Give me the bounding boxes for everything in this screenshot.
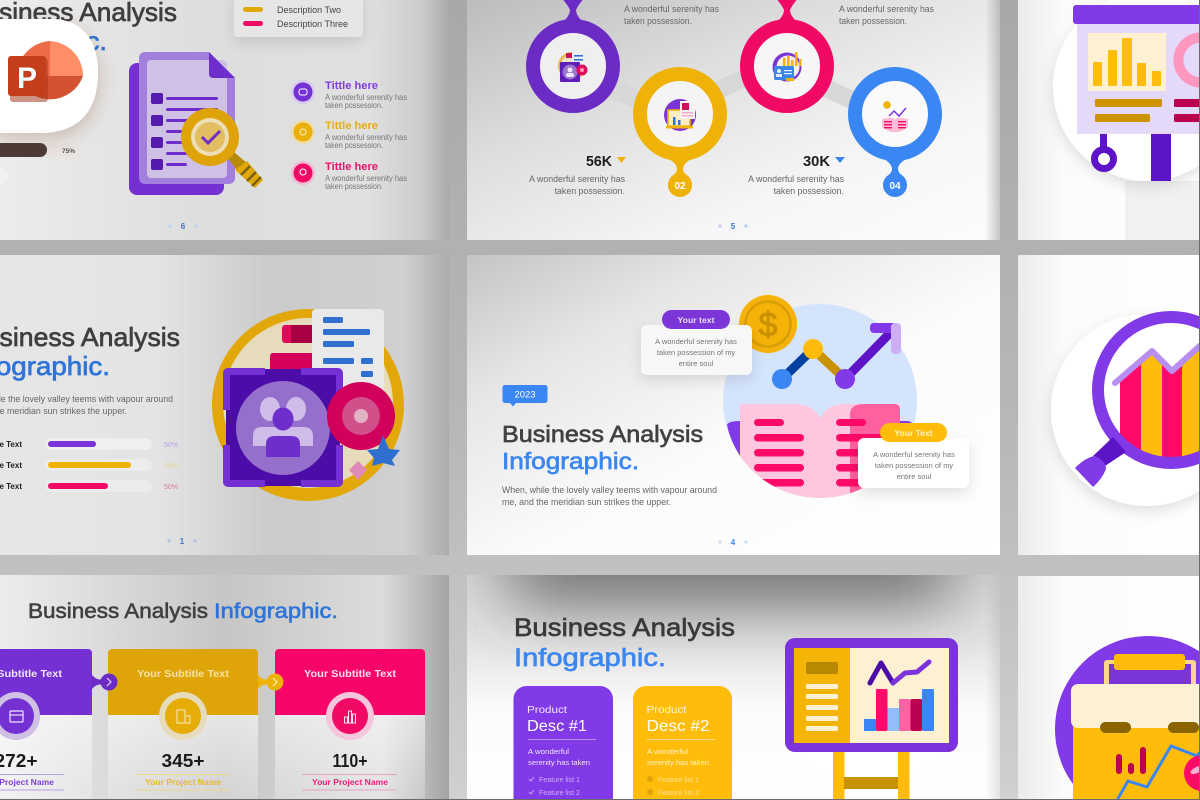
heading: cards title: Business Analysis [28,600,208,623]
chart: progress bars: 50% [164,463,178,470]
card: gold subtitle: 345+ [162,751,204,771]
panel: slide 5 ring timeline [467,0,1000,240]
logo: PowerPoint icon on white badge: P [17,62,37,95]
arrow: gold connector [258,674,284,690]
card: product desc 1: Feature list 1 [539,777,580,784]
icon: board with bars and donut [1073,5,1200,181]
callout: your text gold: A wonderful serenity has [873,450,955,459]
text: main paragraph [502,485,717,508]
page number 1 [167,537,197,546]
icon: mini report screen [664,99,696,131]
arrow: purple connector [92,674,118,690]
card: product desc 1: Product [527,704,567,716]
callout: your text gold: taken possession of my [875,461,953,470]
card: product desc 2: Feature list 1 [658,777,699,784]
progress bar: 75% [62,148,75,155]
callout: your text purple: Your text [678,315,715,325]
icon: briefcase with chart [1055,636,1200,800]
heading: main title: Business Analysis [502,421,703,447]
card: product desc 1: serenity has taken [528,758,590,767]
card: gold subtitle [108,649,258,800]
stat: 56K: A wonderful serenity has [529,174,626,184]
card: pink subtitle: Your Project Name [312,778,389,787]
item: pink title: A wonderful serenity has [325,174,407,183]
icon: mini id card and chart [772,52,802,82]
callout: your text gold: Your Text [894,428,933,438]
card: product desc 1: Desc #1 [527,718,587,735]
callout: your text purple: taken possession of my [657,348,735,357]
heading: main title: Infographic. [502,448,639,474]
item: gold title: Tittle here [325,120,378,132]
heading: slide 1 title [0,322,180,381]
badge: 2023: 2023 [514,390,536,400]
ring: gold step 02 [640,74,720,197]
heading: cards title [28,600,338,623]
icon: mini portrait target [558,52,588,82]
item: purple title [291,80,407,110]
panel: bottom right briefcase [1018,576,1200,800]
item: purple title: taken possession. [325,101,383,110]
icon: magnifier over stripes [1075,317,1200,487]
chart: progress bars: 50% [164,484,178,491]
chart: progress bars: 50% [164,442,178,449]
connectors between rings [715,71,854,108]
ring: blue step 04: 04 [889,181,901,192]
item: pink title: taken possession. [325,182,383,191]
ring: gold step 02: 02 [674,181,686,192]
card: purple subtitle [0,649,92,800]
stat: 56K: taken possession. [555,186,625,196]
page number 5: 5 [731,222,736,231]
panel: slide 6 document review [0,0,449,240]
logo: PowerPoint icon on white badge [0,19,98,133]
icon: dollar coin [739,295,797,353]
item: pink title [291,161,407,191]
item: gold title: taken possession. [325,141,383,150]
page number 4: 4 [731,538,736,547]
heading: product title: Business Analysis [514,614,735,642]
text: step 03 description [839,4,935,26]
stat: 30K: taken possession. [774,186,844,196]
ring: blue step 04 [855,74,935,197]
card: gold subtitle: Your Subtitle Text [137,668,230,680]
text: step 01 description: taken possession. [624,16,692,26]
icon: portrait frame with target [212,309,404,501]
stat: 30K: 30K [803,154,831,170]
item: purple title: A wonderful serenity has [325,93,407,102]
item: pink title: Tittle here [325,161,378,173]
page number 4 [718,538,748,547]
chart: progress bars [0,438,178,492]
card: product desc 2: serenity has taken [647,758,709,767]
panel: slide 2 product board [467,575,1000,799]
heading: slide 6 title [0,0,177,56]
text: step 03 description: taken possession. [839,16,907,26]
card: gold subtitle: Your Project Name [145,778,222,787]
ring: pink step 03 [747,0,827,106]
stat: 30K: A wonderful serenity has [748,174,845,184]
card: product desc 1 [514,686,613,800]
card: pink subtitle: 110+ [332,751,368,771]
legend card: Description Two [277,5,341,16]
card: product desc 2: Product [646,704,687,716]
ring: purple step 01 [533,0,613,106]
heading: product title [514,614,735,672]
heading: cards title: Infographic. [214,600,338,623]
badge: 2023 [502,385,548,406]
page number 6 [168,222,198,231]
callout: your text purple: A wonderful serenity has [655,337,737,346]
text: slide 1 paragraph [0,394,173,417]
card: product desc 1: A wonderful [528,747,569,756]
icon: presentation board on easel [785,638,958,800]
callout: your text gold [858,423,969,488]
stat: 56K [529,154,626,196]
card: product desc 1: Feature list 2 [539,790,580,797]
item: gold title: A wonderful serenity has [325,133,407,142]
progress bar [0,143,82,184]
panel: slide 4 main slide [467,255,1000,555]
text: step 01 description: A wonderful serenity has [624,4,720,14]
icon: mini book and trend [882,101,908,132]
panel: slide 1 business analysis [0,255,449,555]
panel: top right presentation board [1018,0,1200,240]
heading: main title [502,421,703,474]
card: product desc 2: Desc #2 [646,718,710,735]
card: pink subtitle [275,649,425,800]
heading: product title: Infographic. [514,644,666,672]
card: product desc 2: Feature list 2 [658,790,699,797]
callout: your text gold: entire soul [897,472,932,481]
callout: your text purple: entire soul [679,359,714,368]
text: step 03 description: A wonderful serenity has [839,4,935,14]
text: step 01 description [624,4,720,26]
panel: middle right magnifier chart [1018,255,1200,555]
page number 5 [718,223,748,229]
icon: pale blue circle with book and chart [723,304,917,500]
stat: 56K: 56K [586,154,613,170]
text: main paragraph: When, while the lovely valley teems with vapour around [502,485,717,496]
page number 6: 6 [181,222,186,231]
legend card: Description Three [277,19,348,30]
card: product desc 2: A wonderful [647,747,688,756]
panel: slide 3 subtitle cards [0,575,449,800]
text: main paragraph: me, and the meridian sun strikes the upper. [502,497,671,508]
icon: document with magnifier [129,52,263,195]
icon: dollar coin: $ [759,306,778,344]
card: pink subtitle: Your Subtitle Text [304,668,397,680]
stat: 30K [748,154,845,196]
legend card [234,0,363,37]
callout: your text purple [641,310,752,375]
item: purple title: Tittle here [325,80,378,92]
card: product desc 2 [633,686,732,800]
item: gold title [291,120,407,150]
page number 1: 1 [180,537,185,546]
